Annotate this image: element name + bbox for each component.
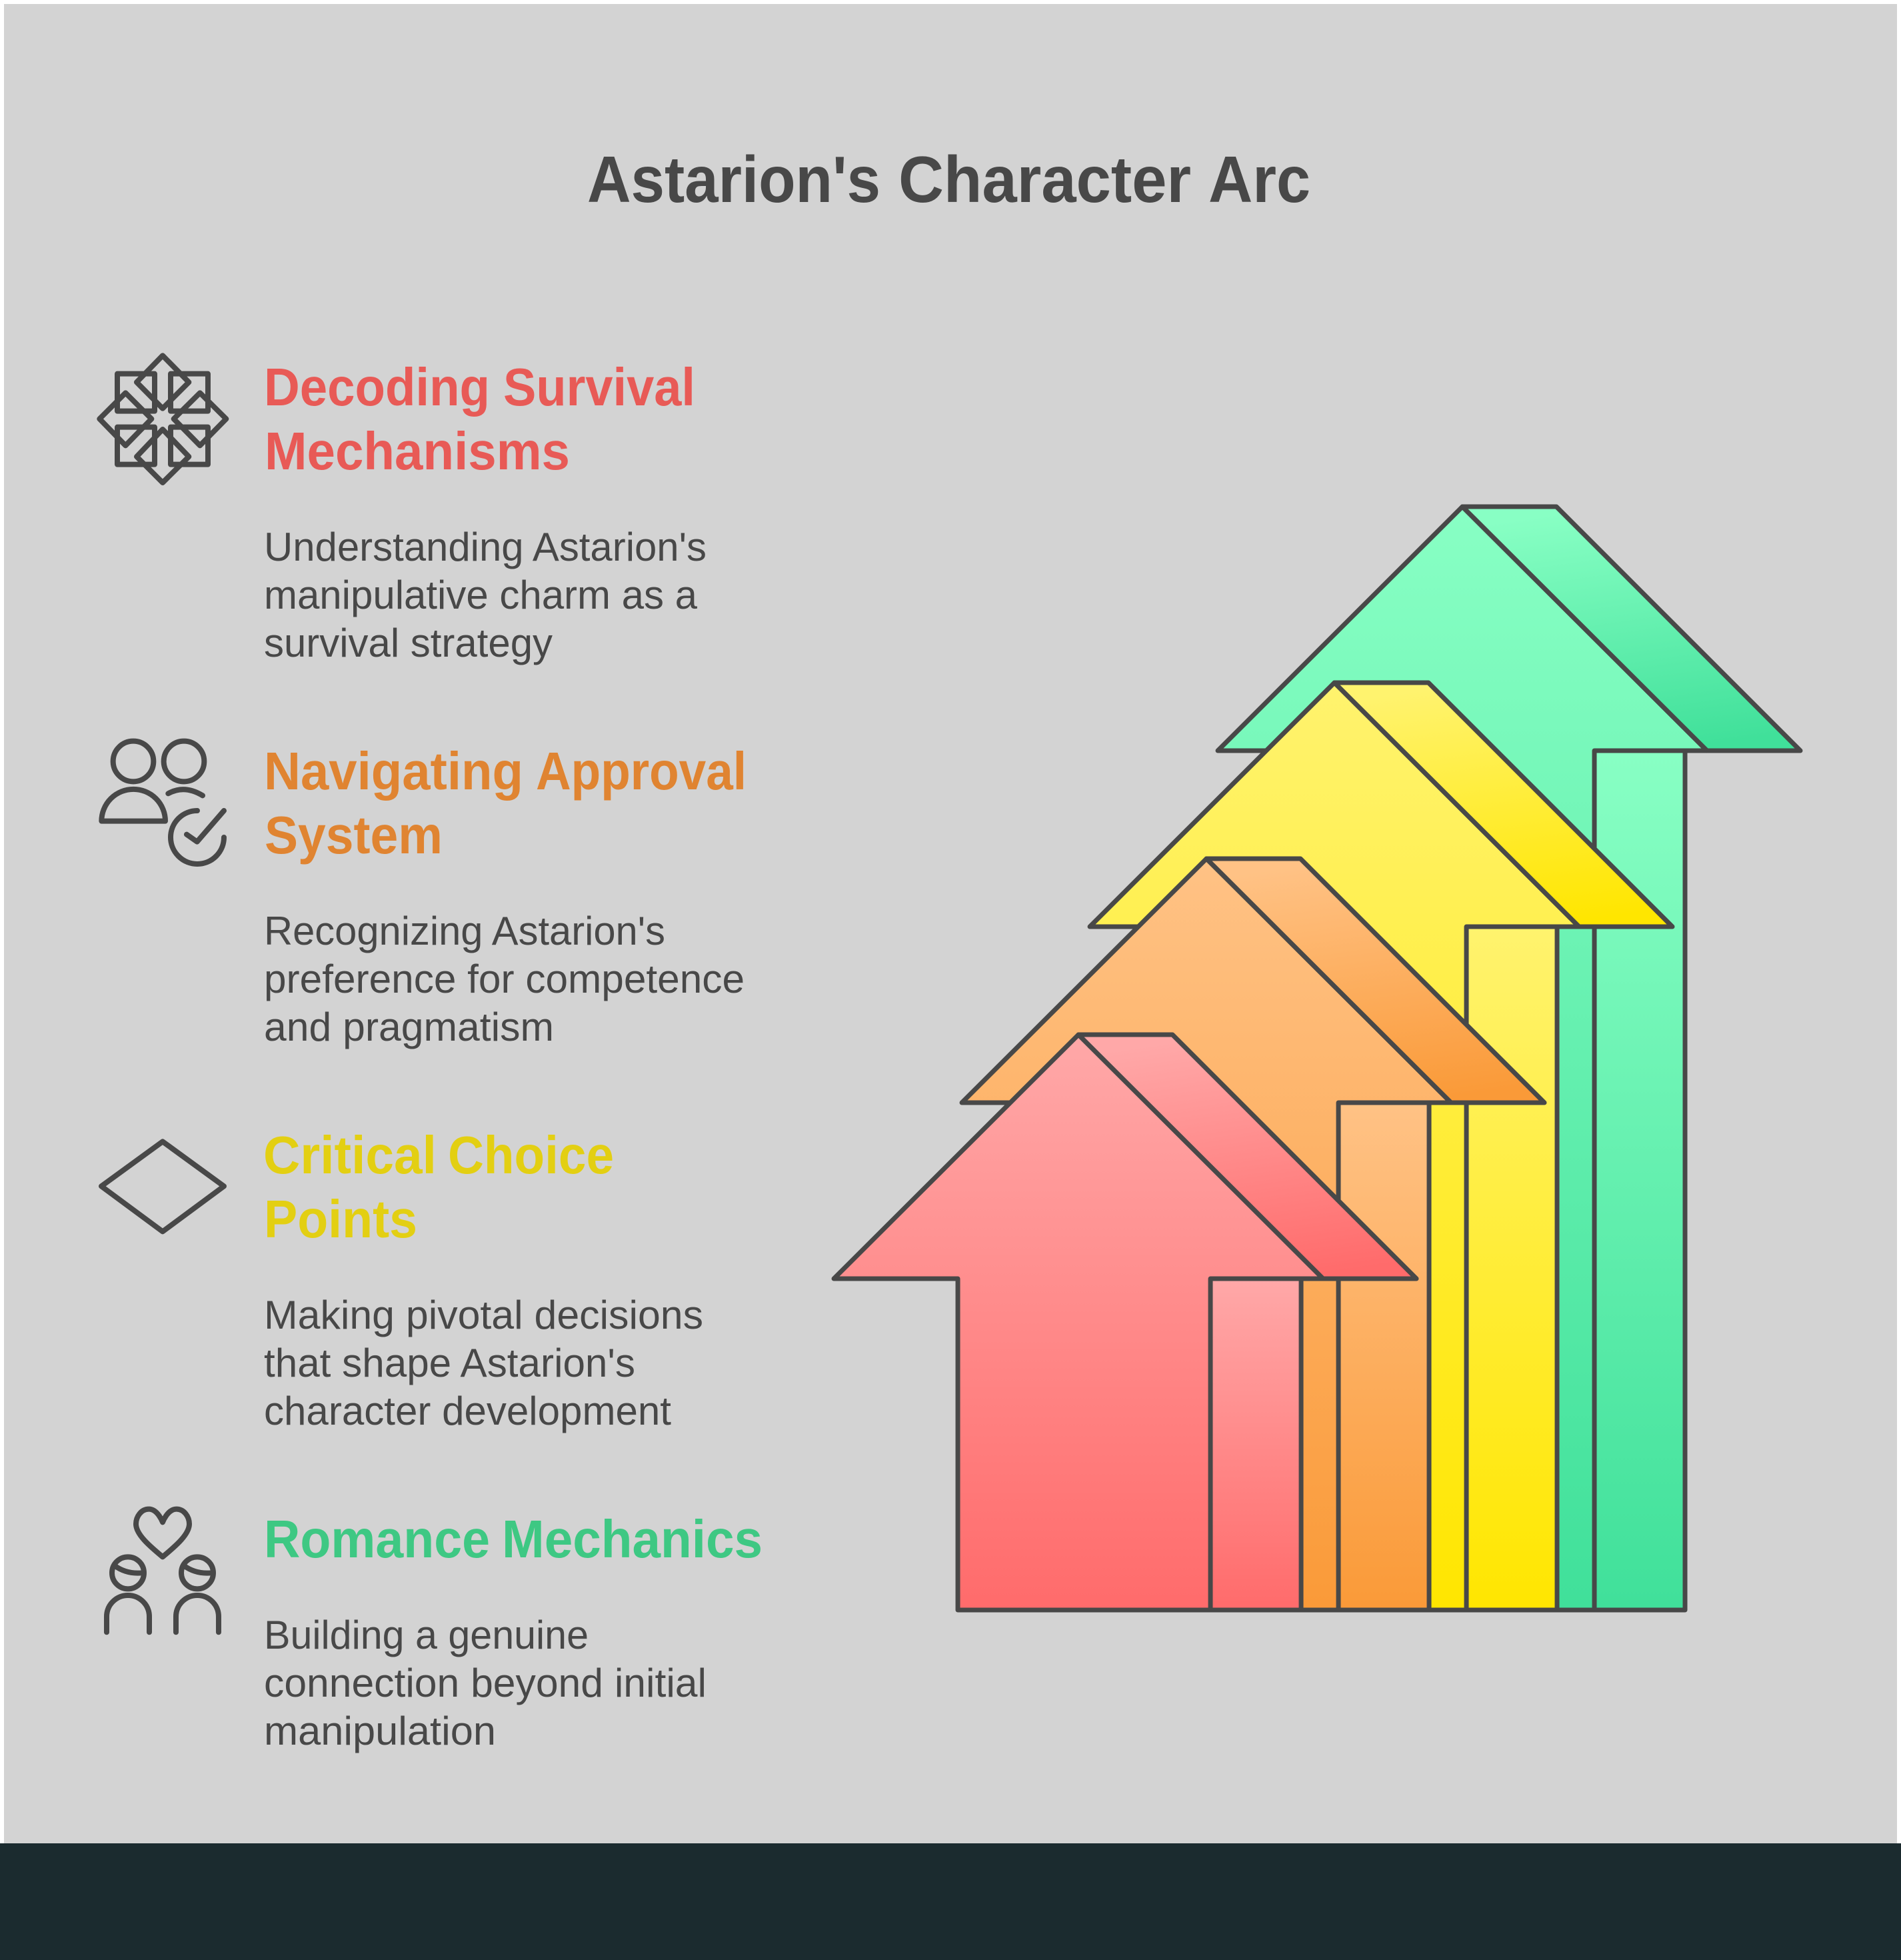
footer bar [0, 1843, 1901, 1960]
arrow: red (Decoding Survival Mechanisms) [834, 1035, 1416, 1610]
description: Romance Mechanics: Building a genuine [264, 1613, 589, 1657]
heading: Critical Choice Points: Critical [263, 1125, 437, 1185]
heading: Navigating Approval System: System [265, 805, 443, 865]
heading: Romance Mechanics: Romance [264, 1509, 490, 1569]
description: Decoding Survival Mechanisms: survival strategy [264, 621, 553, 665]
heading: Navigating Approval System: Navigating [264, 741, 523, 801]
description: Decoding Survival Mechanisms: manipulative charm as a [264, 573, 698, 617]
item: Critical Choice Points [101, 1125, 703, 1433]
title: Astarion's [587, 143, 881, 216]
description: Romance Mechanics: connection beyond initial [264, 1661, 707, 1705]
heading: Romance Mechanics: Mechanics [502, 1509, 763, 1569]
heading: Decoding Survival Mechanisms: Decoding [264, 357, 490, 417]
arrow: orange (Navigating Approval System) [962, 859, 1544, 1610]
title: Character [899, 143, 1191, 216]
item: Decoding Survival Mechanisms [99, 355, 707, 665]
heading: Decoding Survival Mechanisms: Mechanisms [265, 421, 570, 481]
heading: Decoding Survival Mechanisms [264, 357, 695, 481]
description: Romance Mechanics [264, 1613, 707, 1753]
heading: Critical Choice Points: Choice [448, 1125, 614, 1185]
title: Arc [1208, 143, 1310, 216]
description: Navigating Approval System: preference for competence [264, 957, 745, 1001]
heading: Navigating Approval System [264, 741, 747, 865]
description: Romance Mechanics: manipulation [264, 1709, 496, 1753]
icon: eight-point geometric star [99, 355, 226, 483]
title [587, 143, 1310, 216]
description: Critical Choice Points [264, 1293, 703, 1433]
chart: four ascending stacked arrows [834, 507, 1800, 1610]
description: Navigating Approval System [264, 909, 745, 1049]
heading: Critical Choice Points: Points [264, 1189, 417, 1249]
item: Navigating Approval System [101, 741, 747, 1049]
description: Navigating Approval System: and pragmatism [264, 1005, 554, 1049]
description: Decoding Survival Mechanisms: Understanding Astarion's [264, 525, 707, 569]
arrow: yellow (Critical Choice Points) [1090, 683, 1672, 1610]
heading: Romance Mechanics [264, 1509, 763, 1569]
heading: Decoding Survival Mechanisms: Survival [503, 357, 695, 417]
icon: diamond [101, 1141, 224, 1231]
icon: two people and a heart [107, 1509, 219, 1632]
description: Critical Choice Points: character development [264, 1389, 671, 1433]
arrow: green (Romance Mechanics) [1218, 507, 1800, 1610]
description: Critical Choice Points: that shape Astarion's [264, 1341, 635, 1385]
heading: Critical Choice Points [263, 1125, 614, 1249]
description: Decoding Survival Mechanisms [264, 525, 707, 665]
description: Critical Choice Points: Making pivotal decisions [264, 1293, 703, 1337]
item: Romance Mechanics [107, 1509, 763, 1753]
icon: two people with check mark [101, 741, 224, 864]
description: Navigating Approval System: Recognizing Astarion's [264, 909, 665, 953]
heading: Navigating Approval System: Approval [536, 741, 747, 801]
